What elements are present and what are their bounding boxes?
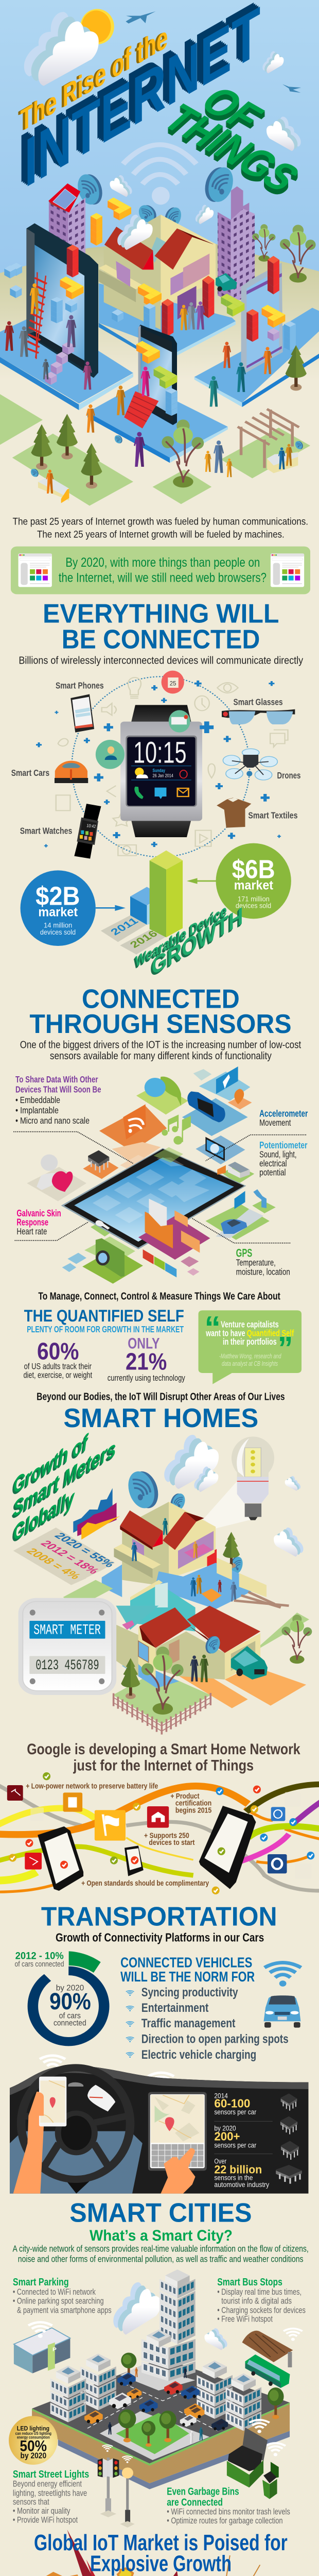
arrow: green <box>187 878 216 884</box>
wifi icons <box>102 2420 286 2463</box>
label: Smart Glasses: Smart Glasses <box>234 697 283 707</box>
callout: LED lighting: by 2020 <box>21 2451 46 2460</box>
device: fitness band <box>74 804 101 859</box>
label: 2012 10% <box>14 1951 64 1969</box>
callout: $6B market: 171 million <box>238 895 270 903</box>
hand on console <box>161 2148 196 2194</box>
text: smart street lights: sensors that <box>13 2497 49 2506</box>
pointer lines <box>13 1132 306 1243</box>
callout: venture capitalists quote: want to have <box>205 1329 245 1338</box>
chart: area growth <box>73 1488 120 1539</box>
icon: airplanes <box>126 11 301 93</box>
trees and fence <box>114 1615 312 1735</box>
blue cubes <box>4 263 77 323</box>
text: smart parking: • Online parking spot searching <box>13 2296 104 2306</box>
icon: LED bulb <box>203 1436 274 1529</box>
lawns <box>0 394 310 506</box>
steps <box>45 342 74 385</box>
stat: 60%: of US adults track their <box>24 1361 92 1371</box>
icon: wifi discs <box>125 1469 244 1575</box>
parking garage <box>14 2328 70 2374</box>
small cloud <box>204 2328 227 2350</box>
sensors stats: sensors in the <box>214 2174 253 2182</box>
icon: plus signs <box>36 681 281 848</box>
heading <box>43 599 279 654</box>
network feature labels <box>26 1782 211 1888</box>
orange tetris blocks and column <box>91 197 131 246</box>
text: garbage bins: are Connected <box>167 2496 223 2508</box>
text: garbage bins: Even Garbage Bins <box>167 2485 239 2497</box>
faint play and camera icons <box>118 831 211 856</box>
data tiles: 2020, 2012, 2008: 2008 = 4% <box>24 1546 84 1581</box>
stat: 60% <box>23 1337 92 1380</box>
icon: person and heart <box>37 1155 73 1192</box>
red stairs <box>124 391 158 429</box>
text: galvanic skin response <box>16 1208 61 1237</box>
device: smart watch center: 26 Jan 2014 <box>153 773 173 778</box>
donut chart: 10% to 90%: connected <box>54 2019 86 2027</box>
heading: connected through sensors <box>29 984 292 1039</box>
heading: connected vehicles: WILL BE THE NORM FOR <box>120 1969 255 1985</box>
app tiles <box>7 1785 311 1879</box>
text: smart street lights: • Monitor air quality <box>13 2506 70 2516</box>
checkmarks <box>9 1772 314 1894</box>
stat: only 21% <box>108 1335 185 1383</box>
sensors stats: 22 billion <box>214 2163 262 2176</box>
callout: venture capitalists quote: “ <box>204 1309 221 1346</box>
benches <box>38 452 298 503</box>
text: GPS <box>236 1247 290 1277</box>
tetris blocks <box>138 283 285 328</box>
text: GPS: Temperature, <box>236 1258 276 1268</box>
icon: smart meter: 0123 456789 <box>36 1657 99 1674</box>
sensors stats: Over <box>214 2157 226 2165</box>
network feature labels: + Low-power network to preserve battery life <box>26 1782 158 1790</box>
heading: global IoT market: Explosive Growth <box>90 2551 232 2576</box>
icon: garbage bins <box>227 2428 279 2499</box>
pedestrians <box>135 2367 187 2378</box>
stat: only 21%: currently using technology <box>108 1372 185 1383</box>
panel: street lights, garbage bins, market growth <box>7 2406 307 2576</box>
icon: RSS <box>123 1104 146 1140</box>
icon: envelope and document <box>145 1199 200 1253</box>
heading: connected vehicles: CONNECTED VEHICLES <box>120 1955 252 1971</box>
device: smart textile shirt <box>217 798 251 828</box>
callout: LED lighting: 50% <box>20 2437 47 2454</box>
title line: OF THINGS <box>153 79 310 199</box>
small bursts <box>43 2567 299 2576</box>
list: connected vehicle uses <box>126 1985 289 2061</box>
trees <box>31 345 307 488</box>
text: share data <box>15 1075 101 1126</box>
device: fitness band: 10:42 <box>86 823 96 829</box>
heading: BE CONNECTED <box>62 624 260 654</box>
data tiles: 2020, 2012, 2008 <box>13 1528 118 1585</box>
callout: $6B market <box>216 843 291 919</box>
icon: faint wifi signal <box>123 145 197 205</box>
text: share data: To Share Data With Other <box>15 1075 98 1085</box>
cloud behind tower <box>113 2282 161 2335</box>
sensors stats: 2014 <box>214 2092 228 2100</box>
icon: key <box>96 1220 110 1230</box>
icon: smart meter <box>19 1598 116 1695</box>
text: galvanic skin response: Response <box>16 1217 48 1228</box>
text: smart street lights <box>13 2468 89 2524</box>
list: connected vehicle uses: Entertainment <box>141 2001 208 2014</box>
chart title: growth of smart meters globally: Smart Meters <box>13 1435 116 1522</box>
pergola <box>238 409 299 468</box>
heading: SMART CITIES <box>69 2198 252 2228</box>
ground <box>0 241 319 550</box>
text: potentiometer: potential <box>259 1168 286 1178</box>
panel: sensors <box>13 1066 308 1384</box>
text: galvanic skin response: Heart rate <box>16 1227 47 1237</box>
ribbons <box>0 1784 319 1892</box>
text: smart street lights: lighting, streetlights have <box>13 2488 87 2498</box>
callout: web browsers <box>11 547 310 594</box>
rays <box>46 2555 278 2576</box>
text: share data: Devices That Will Soon Be <box>15 1084 101 1095</box>
icon: small clouds <box>110 51 301 224</box>
text: smart bus stops: • Free WiFi hotspot <box>217 2314 273 2324</box>
icon: chip <box>88 1150 109 1173</box>
park trees <box>118 2410 176 2447</box>
icon: house <box>217 1162 250 1178</box>
device: smart glasses <box>222 709 295 724</box>
sensors stats: automotive industry <box>214 2181 269 2189</box>
wifi icons above dashboard <box>40 2056 174 2090</box>
icon: parking and arrow <box>235 1189 267 1209</box>
device: smart watch center <box>120 705 202 837</box>
icon: app tiles <box>143 1249 176 1277</box>
parking garage: P <box>52 2347 57 2352</box>
device: smart car <box>55 761 88 783</box>
panel: wearable device growth chart <box>20 831 302 1062</box>
text: accelerometer <box>259 1108 308 1128</box>
icon: pergola <box>234 1592 289 1607</box>
donut chart: 10% to 90% <box>33 1951 104 2042</box>
text: smart street lights: Beyond energy efficient <box>13 2479 82 2488</box>
wifi icons <box>28 2322 303 2341</box>
text: accelerometer: Movement <box>259 1118 291 1128</box>
device: drone <box>223 749 277 780</box>
icon: plane tile and pin <box>216 1066 244 1104</box>
panel: smart homes <box>13 1391 304 1632</box>
trees <box>121 2352 284 2419</box>
icon: game controller <box>187 1091 225 1122</box>
chart title: Wearable Device Growth <box>135 901 243 980</box>
people <box>5 283 292 494</box>
phone with map <box>37 2077 66 2126</box>
icon: calendar badge: 25 <box>170 680 176 687</box>
callout: LED lighting: LED lighting <box>17 2425 49 2432</box>
device: smart phone <box>70 694 94 733</box>
icon: chips <box>276 2093 302 2184</box>
platform: house <box>99 283 236 355</box>
network feature labels: + Supports 250 <box>144 1832 189 1840</box>
intro text <box>13 516 308 540</box>
stat: 60%: 60% <box>37 1337 79 1364</box>
callout: $2B market: devices sold <box>40 928 76 937</box>
panel: smart cities <box>13 2198 309 2489</box>
house <box>99 215 216 330</box>
text: potentiometer <box>259 1140 307 1178</box>
heading: Google smart home network <box>27 1741 300 1774</box>
icon: clouds <box>164 1435 304 1556</box>
data tiles: 2020, 2012, 2008: 2012 = 18% <box>38 1538 102 1575</box>
network feature labels: + Product <box>170 1792 200 1801</box>
icon: calendar badge <box>162 671 184 693</box>
list: connected vehicle uses: Electric vehicle charging <box>141 2047 256 2061</box>
callout: LED lighting: can reduce US lighting <box>15 2431 51 2436</box>
heading: connected through sensors: CONNECTED <box>82 984 240 1014</box>
callout: 50 billion things <box>13 2572 94 2576</box>
bar: 2011 <box>130 887 163 925</box>
label: Drones: Drones <box>277 770 300 781</box>
callout: venture capitalists quote: Venture capitalists <box>221 1320 279 1330</box>
buildings <box>50 2269 261 2431</box>
cars and people <box>84 2406 228 2444</box>
right phone device <box>241 263 283 372</box>
label: Smart Watches: Smart Watches <box>20 826 72 836</box>
chart title: Wearable Device Growth: Wearable Device <box>135 901 227 971</box>
heading: Google smart home network: just for the Internet of Things <box>73 1757 254 1774</box>
vehicles <box>109 2372 202 2417</box>
heading: smart homes: SMART HOMES <box>63 1403 258 1433</box>
icon: traffic light and streetlight <box>98 2458 135 2528</box>
tablet device <box>26 223 98 378</box>
panel: smart meter and house exterior <box>0 1598 319 1894</box>
dotted orbit <box>72 676 250 857</box>
platform: right phone <box>112 256 319 407</box>
text: potentiometer: electrical <box>259 1159 287 1169</box>
icon: large wifi <box>264 1962 301 1987</box>
heading: connected vehicles <box>120 1955 255 1985</box>
platform: central phone <box>5 283 307 503</box>
exterior yard <box>113 1606 309 1724</box>
central phone device <box>138 325 177 425</box>
text: garbage bins <box>167 2485 290 2526</box>
sensors stats: sensors per car <box>214 2108 256 2116</box>
explosion <box>7 2530 307 2576</box>
sensors stats: by 2020 <box>214 2125 236 2132</box>
device: smart watch center: 10:15 <box>133 736 187 769</box>
phones <box>38 1806 256 1891</box>
stat: only 21%: ONLY <box>128 1335 160 1352</box>
teal car <box>231 1646 268 1680</box>
heading: the quantified self: THE QUANTIFIED SELF <box>24 1307 184 1325</box>
year labels: 2011 <box>108 916 141 937</box>
callout: venture capitalists quote <box>199 1309 302 1384</box>
icon: large cloud <box>24 12 99 86</box>
chart title: growth of smart meters globally: Globally <box>13 1484 75 1546</box>
text: smart street lights: Smart Street Lights <box>13 2468 89 2480</box>
subheading: What’s a Smart City? <box>90 2227 233 2244</box>
tetris blocks <box>60 277 84 299</box>
icon: blue car on road <box>216 1209 263 1238</box>
text: smart parking <box>13 2276 112 2315</box>
sensors stats: 60-100 <box>214 2097 250 2110</box>
ladder <box>26 272 47 359</box>
heading: the quantified self <box>24 1307 184 1335</box>
text: smart bus stops <box>217 2276 306 2324</box>
sensors stats <box>214 2092 273 2189</box>
text: smart parking: Smart Parking <box>13 2276 69 2288</box>
city block base <box>32 2358 290 2489</box>
panel: everything will be connected <box>11 547 310 859</box>
icon: music notes <box>162 1114 191 1145</box>
title line: OF THINGS: OF <box>191 79 274 138</box>
list: connected vehicle uses: Syncing productivity <box>141 1985 238 1999</box>
callout: $6B market: market <box>234 878 273 892</box>
platform: tablet <box>0 223 133 410</box>
stat: only 21%: 21% <box>126 1348 167 1375</box>
text: share data: • Micro and nano scale <box>15 1116 90 1126</box>
stat: 60%: diet, exercise, or weight <box>23 1370 92 1380</box>
heading: global IoT market <box>34 2531 288 2576</box>
icon: camera <box>96 1238 125 1277</box>
sky <box>0 0 319 309</box>
data tiles: 2020, 2012, 2008: 2020 = 55% <box>51 1531 118 1569</box>
donut chart: 10% to 90%: 90% <box>49 1988 91 2014</box>
label: Smart Cars: Smart Cars <box>11 768 49 778</box>
year tiles <box>101 916 166 955</box>
icon: wifi discs <box>75 165 237 228</box>
text: galvanic skin response: Galvanic Skin <box>16 1208 61 1219</box>
icon: sun <box>80 9 114 44</box>
panel: dashboard <box>10 2065 308 2194</box>
icon: blue car <box>263 1995 300 2028</box>
wifi discs small <box>30 435 304 477</box>
network feature labels: devices to start <box>149 1838 195 1847</box>
heading: the quantified self: PLENTY OF ROOM FOR GROWTH IN THE MARKET <box>27 1324 184 1335</box>
trees top right <box>252 224 316 282</box>
callout: LED lighting <box>9 2416 58 2465</box>
list: connected vehicle uses: Traffic management <box>141 2016 236 2030</box>
donut chart: 10% to 90%: of cars <box>59 2011 81 2020</box>
callout: $2B market: 14 million <box>44 922 72 929</box>
icon: smart meter: SMART METER <box>33 1622 101 1639</box>
text: smart parking: & payment via smartphone apps <box>17 2305 112 2315</box>
network feature labels: certification <box>175 1799 211 1807</box>
year labels <box>108 916 160 950</box>
title: The Rise of the Internet of Things <box>21 0 310 202</box>
network feature labels: + Open standards should be complimentary <box>81 1879 209 1888</box>
teal car <box>216 273 237 292</box>
text: smart bus stops: Smart Bus Stops <box>217 2276 282 2288</box>
bus shelter and bus <box>242 2331 293 2388</box>
year labels: 2016 <box>127 928 160 950</box>
callout: $6B market: $6B <box>232 855 275 884</box>
building: purple tower right <box>218 187 255 302</box>
callout: $2B market: market <box>38 905 78 919</box>
icon: user badge <box>96 740 125 769</box>
text: smart parking: • Connected to WiFi network <box>13 2287 96 2297</box>
text: GPS: GPS <box>236 1247 252 1260</box>
chart title: Wearable Device Growth: GROWTH <box>152 902 243 980</box>
donut chart: 10% to 90%: by 2020 <box>56 1983 84 1992</box>
callout: $6B market: devices sold <box>236 902 271 910</box>
callout: venture capitalists quote: data analyst at CB Insights <box>222 1360 278 1367</box>
house exterior <box>138 1606 268 1682</box>
icon: video tablet <box>205 1137 225 1161</box>
callout: venture capitalists quote: in their portfolios <box>223 1337 277 1347</box>
isometric tiles <box>27 1069 276 1284</box>
text: potentiometer: Sound, light, <box>259 1150 297 1160</box>
icon: mail badge <box>169 710 190 733</box>
callout: LED lighting: energy consumption <box>17 2435 50 2439</box>
label: Smart Phones: Smart Phones <box>56 681 104 691</box>
faint line icons <box>56 677 288 826</box>
text: GPS: moisture, location <box>236 1267 290 1277</box>
arrow: blue <box>96 905 126 911</box>
device: smart watch center: Sunday <box>153 768 165 773</box>
building: purple tower with solar roof <box>48 183 85 282</box>
bar: 2016 <box>150 851 183 937</box>
sensors stats: 200+ <box>214 2130 240 2143</box>
callout: $2B market <box>21 870 96 946</box>
chart title: growth of smart meters globally: Growth of <box>13 1429 89 1499</box>
hero illustration: isometric connected city <box>0 0 319 550</box>
center console map <box>148 2092 207 2171</box>
text: share data: • Embeddable <box>15 1095 60 1106</box>
tablet <box>61 1147 246 1260</box>
icon: chat bubbles <box>145 1077 181 1106</box>
network feature labels: begins 2015 <box>175 1806 211 1815</box>
label: 2012 10%: of cars connected <box>14 1960 64 1969</box>
callout: $2B market: $2B <box>36 882 80 911</box>
description <box>13 2244 309 2264</box>
label: 2012 10%: 2012 - 10% <box>15 1951 64 1961</box>
text: share data: • Implantable <box>15 1106 59 1116</box>
callout: venture capitalists quote: ” <box>278 1330 293 1366</box>
panel: transportation <box>10 1902 308 2194</box>
sensors stats: sensors per car <box>214 2141 256 2149</box>
subheading <box>20 1038 302 1062</box>
text: smart street lights: • Provide WiFi hotspot <box>13 2515 78 2524</box>
smart house <box>63 1502 267 1632</box>
